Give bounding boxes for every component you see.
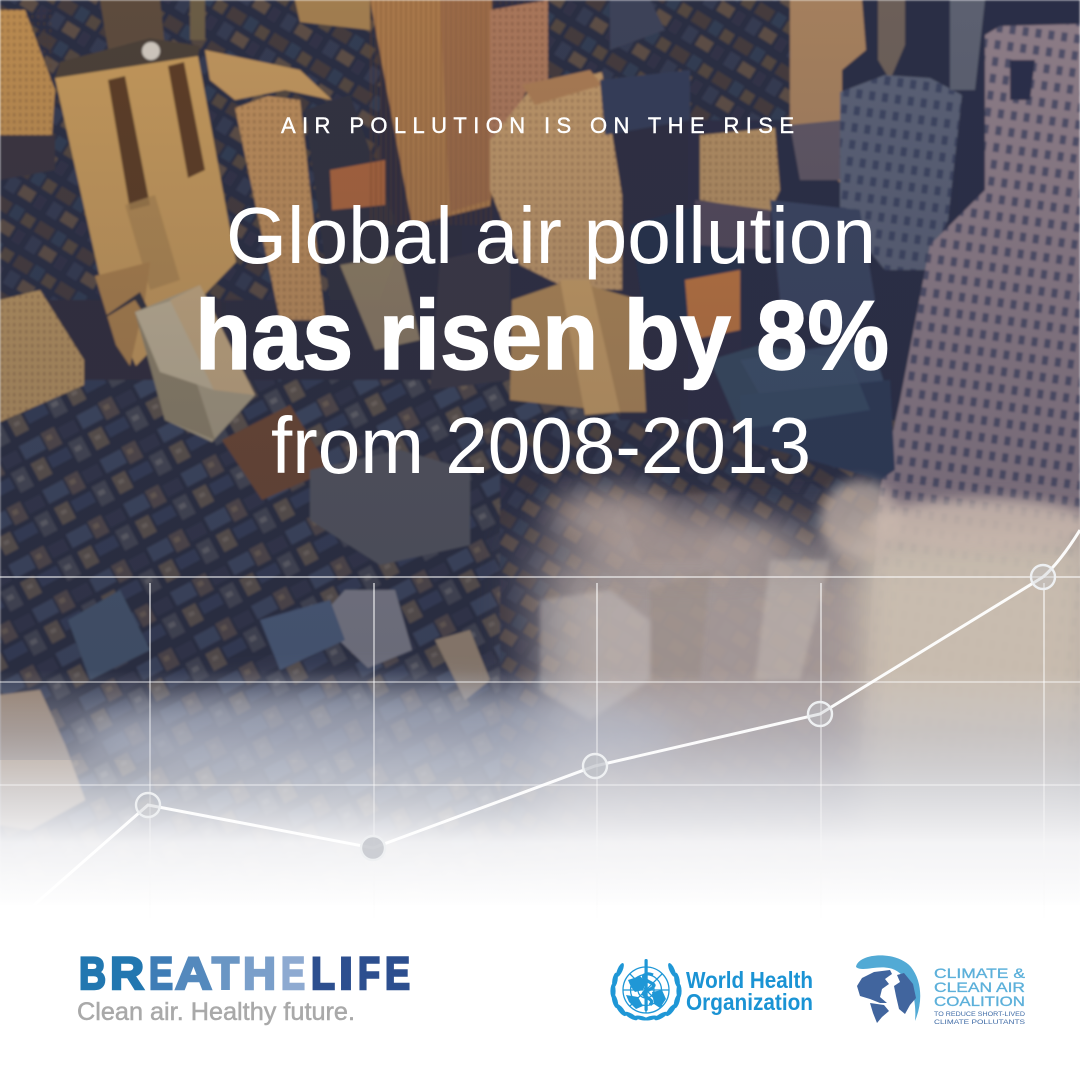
building: central cream block <box>430 70 742 415</box>
wordmark: T <box>212 948 239 999</box>
building: top left tan blocks <box>0 0 370 180</box>
wordmark: R <box>110 948 144 999</box>
CCAC name: CLEAN AIR <box>934 979 1025 995</box>
chart data points <box>136 565 1055 860</box>
wordmark <box>79 948 410 999</box>
CCAC subline: CLIMATE POLLUTANTS <box>934 1019 1026 1026</box>
wordmark: B <box>79 948 106 999</box>
dark photo overlay <box>0 0 1080 760</box>
wordmark: F <box>358 948 380 999</box>
headline <box>195 191 889 490</box>
wordmark: H <box>243 948 276 999</box>
CCAC subline <box>934 1011 1026 1026</box>
building: left lower tan <box>0 690 85 830</box>
CCAC name: COALITION <box>934 993 1025 1009</box>
building: low dark and cream blocks left <box>0 285 470 565</box>
building: central tall tower <box>370 0 548 225</box>
CCAC subline: TO REDUCE SHORT-LIVED <box>934 1011 1025 1018</box>
white fog gradient fading to footer <box>0 670 1080 910</box>
wordmark: A <box>175 948 212 999</box>
wordmark: E <box>281 948 305 999</box>
icon: WHO emblem <box>610 959 682 1022</box>
wordmark: E <box>149 948 173 999</box>
building: mid-left shaft <box>235 95 420 350</box>
building: darker navy mid plaza <box>710 345 895 480</box>
line chart: air pollution trend <box>0 530 1080 918</box>
fogged buildings on right <box>540 490 830 720</box>
building: tall tan tower left <box>55 38 236 366</box>
headline line 2: has risen by 8% <box>195 280 889 390</box>
headline line 3: from 2008-2013 <box>271 401 811 490</box>
tagline: Clean air. Healthy future. <box>77 998 355 1026</box>
building: upper right tan blocks <box>600 0 905 250</box>
wordmark: L <box>311 948 335 999</box>
WHO name: Organization <box>686 989 813 1015</box>
logo: World Health Organization <box>610 959 813 1022</box>
chart trend line <box>26 577 1043 912</box>
building: grey civic block <box>740 0 985 430</box>
WHO name <box>686 967 813 1015</box>
headline line 1: Global air pollution <box>226 191 876 280</box>
eyebrow heading: AIR POLLUTION IS ON THE RISE <box>281 113 794 138</box>
building: right skyscraper <box>860 24 1080 760</box>
laurel right <box>644 962 682 1022</box>
wordmark: I <box>339 948 353 999</box>
logo: BreatheLife <box>77 948 410 1026</box>
wordmark: E <box>385 948 410 999</box>
icon: CCAC globe <box>856 955 920 1023</box>
CCAC name <box>934 965 1026 1009</box>
building: lower mid low blocks <box>68 590 490 700</box>
WHO name: World Health <box>686 967 813 993</box>
logo: Climate and Clean Air Coalition <box>856 955 1026 1026</box>
laurel left <box>610 962 648 1022</box>
chart gridlines <box>0 576 1080 918</box>
CCAC name: CLIMATE & <box>934 965 1026 981</box>
warm fog bank over right city <box>80 480 1080 860</box>
